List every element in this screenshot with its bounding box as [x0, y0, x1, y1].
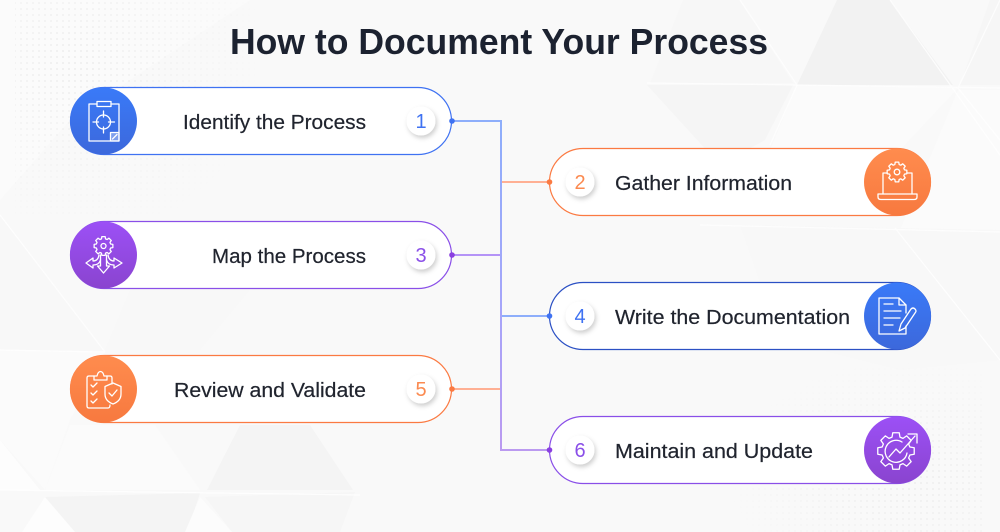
- label: Review and Validate: [174, 380, 366, 402]
- dot: [547, 179, 552, 185]
- icon: laptop with gear: [864, 148, 931, 216]
- icon: gear with arrows: [70, 222, 137, 288]
- pill: [550, 416, 930, 484]
- step 5: review and validate: [70, 356, 455, 422]
- number badge: 3: [415, 245, 427, 267]
- step 2: gather information: [547, 148, 931, 216]
- number badge: [566, 302, 594, 330]
- connector lines: [452, 121, 549, 450]
- pill: [70, 356, 452, 422]
- number badge: 5: [415, 379, 427, 401]
- label: Map the Process: [212, 246, 366, 268]
- icon: target clipboard: [70, 88, 137, 154]
- icon: checklist with shield: [70, 356, 137, 422]
- number badge: 1: [415, 111, 427, 133]
- icon: document with pen: [864, 282, 931, 350]
- pill: [70, 88, 452, 154]
- label: Write the Documentation: [615, 307, 850, 329]
- number badge: 4: [574, 306, 586, 328]
- number badge: [566, 168, 594, 196]
- step 3: map the process: [70, 222, 455, 288]
- step 1: identify the process: [70, 88, 455, 154]
- pill: [70, 222, 452, 288]
- pill: [550, 148, 930, 216]
- icon: gear with rising arrow: [864, 416, 931, 484]
- pill: [550, 282, 930, 350]
- dot: [449, 386, 455, 392]
- step 6: maintain and update: [547, 416, 931, 484]
- dot: [449, 252, 455, 258]
- number badge: [406, 374, 436, 404]
- label: Maintain and Update: [615, 441, 813, 463]
- title: How to Document Your Process: [230, 21, 768, 62]
- label: Identify the Process: [183, 112, 366, 134]
- label: Gather Information: [615, 173, 792, 195]
- number badge: 6: [574, 440, 586, 462]
- dot: [449, 118, 455, 124]
- number badge: 2: [574, 172, 586, 194]
- step 4: write the documentation: [547, 282, 931, 350]
- dot: [547, 447, 552, 453]
- number badge: [406, 106, 436, 136]
- dot: [547, 313, 552, 319]
- number badge: [406, 240, 436, 270]
- number badge: [566, 436, 594, 464]
